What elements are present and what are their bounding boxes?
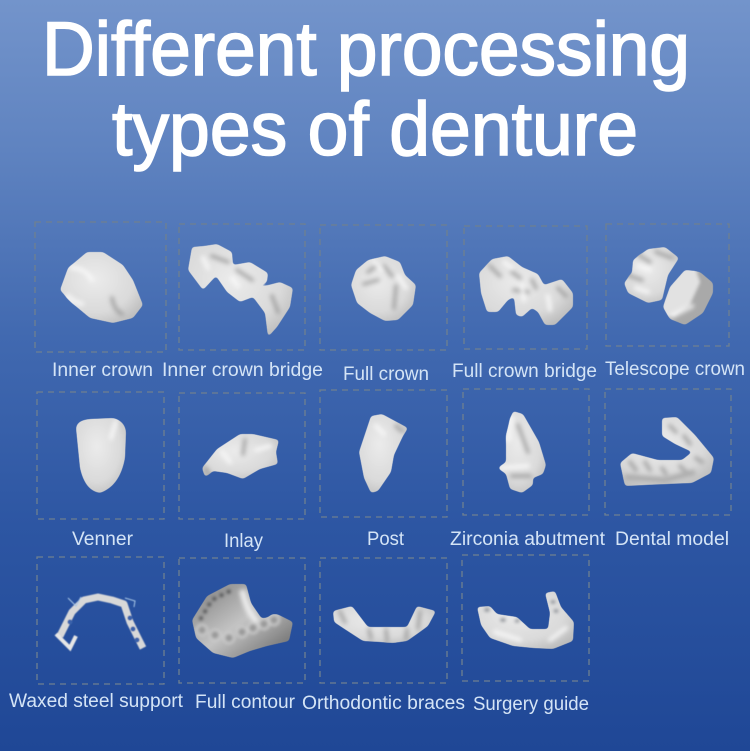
panel: inner crown — [35, 222, 166, 381]
panel: zirconia abutment — [450, 389, 606, 550]
panel: full crown — [320, 225, 447, 385]
label: Telescope crown — [605, 359, 745, 380]
icon: dental model — [620, 417, 714, 486]
panel: inner crown bridge — [162, 224, 323, 381]
label: Inner crown bridge — [162, 360, 323, 381]
icon: zirconia abutment — [498, 411, 546, 493]
icon: waxed steel support — [56, 597, 143, 648]
label: Surgery guide — [473, 694, 589, 715]
frame — [37, 557, 164, 684]
label: Inner crown — [52, 360, 153, 381]
panel: orthodontic braces — [302, 558, 465, 714]
icon: telescope crown — [624, 247, 713, 325]
frame — [37, 392, 164, 519]
label: Full crown bridge — [452, 361, 597, 382]
panel: post — [320, 390, 447, 550]
label: Waxed steel support — [9, 691, 184, 712]
title: types of denture — [112, 87, 638, 172]
panel: full crown bridge — [452, 226, 597, 382]
frame — [179, 224, 305, 350]
label: Full crown — [343, 364, 429, 385]
title: Different processing — [42, 7, 690, 92]
panel: inlay — [179, 393, 305, 552]
icon: veneer — [76, 418, 126, 493]
icon: full crown bridge — [479, 256, 573, 325]
frame — [179, 558, 305, 683]
icon: post — [359, 414, 408, 493]
frame — [35, 222, 166, 352]
frame — [463, 389, 589, 515]
panel: waxed steel support — [9, 557, 184, 712]
icon: inlay — [202, 434, 279, 479]
frame — [606, 224, 729, 346]
icon: surgery guide — [477, 591, 574, 649]
panel: telescope crown — [605, 224, 745, 380]
frame — [320, 390, 447, 517]
frame — [320, 558, 447, 683]
frame — [320, 225, 447, 350]
panel: dental model — [605, 389, 731, 550]
label: Inlay — [224, 531, 263, 552]
icon: full contour — [192, 584, 293, 658]
label: Dental model — [615, 529, 729, 550]
label: Full contour — [195, 692, 296, 713]
panel: full contour — [179, 558, 305, 713]
icon: inner crown — [60, 252, 143, 323]
frame — [462, 555, 589, 681]
frame — [605, 389, 731, 515]
icon: inner crown bridge — [188, 244, 293, 337]
panel: surgery guide — [462, 555, 589, 715]
title — [42, 7, 690, 172]
label: Zirconia abutment — [450, 529, 606, 550]
icon: orthodontic braces — [333, 606, 436, 643]
label: Venner — [72, 529, 134, 550]
label: Post — [367, 529, 405, 550]
icon: full crown — [351, 256, 416, 321]
panel: venner — [37, 392, 164, 550]
frame — [464, 226, 587, 349]
label: Orthodontic braces — [302, 693, 465, 714]
frame — [179, 393, 305, 519]
